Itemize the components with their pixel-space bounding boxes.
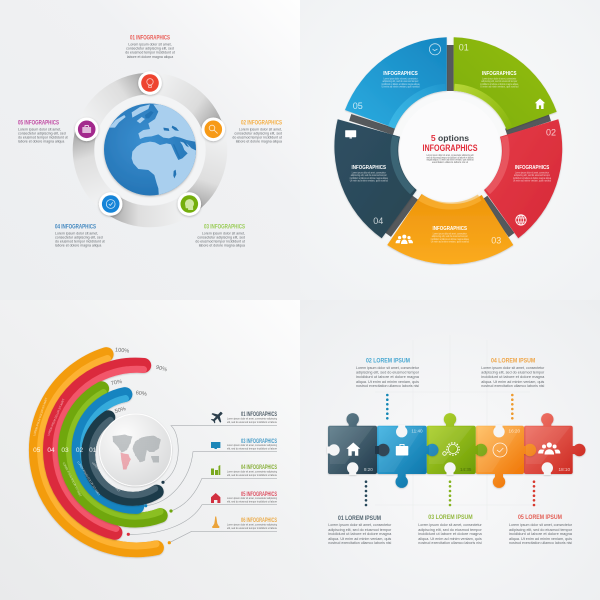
arc captions: LOREM IPSUM DOLOR SIT AMET: [76, 460, 101, 497]
text block 05 lorem ipsum: [509, 514, 573, 545]
text: 05 infographics: [18, 120, 68, 144]
dotted connector 04: [511, 394, 514, 420]
dotted connector 05: [533, 480, 535, 506]
text: green segment: adipiscing elit, sed do eiusmod tempor: [481, 79, 517, 83]
text: red segment: INFOGRAPHICS: [515, 165, 550, 171]
text: 03 infographics: [195, 224, 246, 248]
segment numbers: 02: [546, 128, 556, 138]
arc 02 blue: [79, 394, 137, 507]
text: 01 infographics: 01 INFOGRAPHICS: [130, 34, 171, 42]
icon: bars: [211, 465, 220, 475]
faint background puzzle lines: [375, 335, 540, 520]
text: 05 infographics: do eiusmod tempor incididunt ut: [18, 136, 68, 140]
text block 05 lorem ipsum: aliqua. Ut enim ad minim veniam, quis: [509, 537, 572, 541]
text block 02 lorem ipsum: [356, 357, 420, 388]
globe: [104, 104, 198, 198]
percent labels: 60%: [135, 390, 147, 398]
centre title: exercitation ullamco laboris nisi ut: [432, 160, 468, 164]
text block 02 lorem ipsum: incididunt ut labore et dolore magna: [356, 375, 419, 379]
text block 04 lorem ipsum: incididunt ut labore et dolore magna: [481, 375, 544, 379]
badge: red bulb: [138, 71, 162, 95]
percent labels: 90%: [155, 365, 167, 373]
panel: concentric arcs chart: [32, 347, 277, 550]
central disc with world map: [100, 414, 172, 486]
text block 04 lorem ipsum: aliqua. Ut enim ad minim veniam, quis: [481, 380, 545, 384]
text: orange segment: adipiscing elit, sed do eiusmod tempor: [432, 234, 468, 238]
text: green segment: Lorem ipsum dolor sit amet, consectetur: [482, 76, 516, 80]
text block 04 lorem ipsum: nostrud exercitation ullamco laboris nisi: [481, 384, 545, 388]
text: red segment: incididunt ut labore et dolore magna aliqua: [513, 176, 551, 180]
legend: 03 infographics: 03 INFOGRAPHICS: [241, 438, 277, 445]
percent labels: [110, 347, 167, 415]
text block 03 lorem ipsum: aliqua. Ut enim ad minim veniam, quis: [418, 537, 482, 541]
icon: people: [396, 235, 413, 244]
text: red segment: Lorem ipsum dolor sit amet, consectetur: [515, 170, 549, 174]
text block 04 lorem ipsum: adipiscing elit, sed do eiusmod tempor: [481, 370, 545, 374]
text: blue segment: Ut enim ad minim veniam, quis nostrud: [382, 85, 420, 89]
legend: 01 infographics: Lorem ipsum dolor sit amet, consectetur adipiscing: [227, 417, 277, 421]
centre title: sed do eiusmod tempor incididunt ut labore et dolore: [426, 155, 474, 159]
arc captions: LOREM IPSUM DOLOR SIT AMET: [91, 461, 121, 493]
text block 05 lorem ipsum: Lorem ipsum dolor sit amet, consectetur: [509, 523, 573, 527]
legend: 05 infographics: [227, 491, 277, 504]
text: 05 infographics: 05 INFOGRAPHICS: [18, 120, 60, 126]
text: 04 infographics: consectetur adipiscing elit, sed: [55, 236, 103, 240]
connector strips: [349, 45, 551, 237]
arc numbers: 01: [89, 447, 97, 454]
icon: monitor: [211, 442, 220, 449]
arc numbers: 05: [33, 447, 41, 454]
text: 02 infographics: 02 INFOGRAPHICS: [241, 120, 283, 126]
text block 03 lorem ipsum: nostrud exercitation ullamco laboris nisi: [418, 541, 482, 545]
text: dark segment: adipiscing elit, sed do eiusmod tempor: [351, 173, 387, 177]
text: dark segment: [350, 165, 388, 183]
text: 03 infographics: labore et dolore magna aliqua: [199, 244, 245, 248]
globe halo: [94, 94, 206, 206]
time labels: 9:20: [364, 467, 373, 472]
leader dots: [127, 481, 173, 544]
time labels: 14:35: [460, 467, 472, 472]
text: blue segment: [382, 71, 420, 89]
text: 02 infographics: labore et dolore magna aliqua: [236, 140, 282, 144]
segment 05 blue: [345, 37, 447, 128]
puzzle piece 01 dark: [327, 413, 389, 475]
text: 05 infographics: Lorem ipsum dolor sit amet,: [18, 128, 61, 132]
centre title: 5 options: [431, 133, 469, 143]
legend: 04 infographics: [227, 464, 277, 477]
arc 03 green: [65, 389, 160, 520]
text block 01 lorem ipsum: Lorem ipsum dolor sit amet, consectetur: [328, 523, 392, 527]
dotted connector 01: [365, 480, 367, 506]
text: 03 infographics: Lorem ipsum dolor sit amet,: [202, 232, 245, 236]
text block 03 lorem ipsum: 03 LOREM IPSUM: [428, 514, 473, 521]
text: orange segment: Lorem ipsum dolor sit amet, consectetur: [433, 232, 467, 236]
segment 02 red: [484, 119, 562, 238]
segment numbers: 03: [491, 236, 501, 246]
white centre disc: [399, 99, 501, 201]
text: 04 infographics: Lorem ipsum dolor sit amet,: [55, 232, 98, 236]
arc 04 red: [50, 365, 144, 532]
percent labels: 50%: [114, 406, 127, 415]
text block 01 lorem ipsum: 01 LOREM IPSUM: [338, 515, 381, 522]
centre title: [422, 133, 478, 164]
icon: tower: [212, 516, 219, 528]
legend: 04 infographics: 04 INFOGRAPHICS: [241, 464, 277, 471]
legend: 01 infographics: 01 INFOGRAPHICS: [241, 411, 277, 418]
text block 05 lorem ipsum: adipiscing elit, sed do eiusmod tempor: [509, 528, 573, 532]
badge: green head: [178, 192, 201, 216]
text: dark segment: Lorem ipsum dolor sit amet, consectetur: [352, 170, 386, 174]
text block 04 lorem ipsum: [481, 357, 545, 388]
puzzle piece 02 blue: [377, 425, 438, 488]
centre title: Lorem ipsum dolor sit amet, consectetur adipiscing elit: [426, 153, 474, 157]
text block 03 lorem ipsum: incididunt ut labore et dolore magna: [418, 532, 482, 536]
legend: 01 infographics: [227, 411, 277, 424]
arc captions: LOREM IPSUM DOLOR SIT AMET: [32, 397, 48, 436]
time labels: 16:20: [509, 428, 520, 434]
time labels: 11:40: [411, 428, 423, 434]
icon: plane: [211, 412, 223, 423]
text: 04 infographics: do eiusmod tempor incididunt ut: [55, 240, 105, 244]
percent labels: 100%: [115, 347, 129, 355]
badge: blue clock: [99, 192, 122, 216]
icon: clock: [429, 44, 441, 55]
arc 05 orange: [36, 354, 156, 550]
glass highlights: [330, 427, 570, 472]
badge: orange magnifier: [202, 118, 225, 141]
legend: 03 infographics: [227, 438, 277, 450]
text: dark segment: incididunt ut labore et dolore magna aliqua: [350, 176, 388, 180]
legend: 04 infographics: Lorem ipsum dolor sit amet, consectetur adipiscing: [227, 470, 277, 474]
time labels: [364, 428, 570, 472]
puzzle piece 05 red: [524, 413, 586, 475]
text block 03 lorem ipsum: [418, 514, 483, 545]
icon: people: [538, 442, 560, 454]
text: green segment: incididunt ut labore et dolore magna aliqua: [480, 82, 519, 86]
icon: house: [211, 493, 220, 503]
icon: monitor: [345, 130, 356, 138]
text block 02 lorem ipsum: aliqua. Ut enim ad minim veniam, quis: [356, 380, 419, 384]
text block 01 lorem ipsum: nostrud exercitation ullamco laboris nisi: [328, 541, 392, 545]
text: blue segment: adipiscing elit, sed do eiusmod tempor: [382, 79, 419, 83]
text: green segment: [480, 71, 519, 89]
legend: 06 infographics: elit, sed do eiusmod tempor incididunt ut labore: [227, 526, 277, 530]
text block 04 lorem ipsum: 04 LOREM IPSUM: [491, 357, 535, 364]
text block 02 lorem ipsum: nostrud exercitation ullamco laboris nisi: [356, 384, 419, 388]
text: 03 infographics: do eiusmod tempor incididunt ut: [195, 240, 245, 244]
text: dark segment: INFOGRAPHICS: [352, 165, 386, 171]
text: 02 infographics: consectetur adipiscing elit, sed: [234, 132, 282, 136]
icon: house: [346, 442, 360, 456]
text: dark segment: Ut enim ad minim veniam, quis nostrud: [350, 179, 388, 183]
time labels: 18:10: [559, 467, 570, 472]
panel: globe infographic: [18, 34, 283, 248]
legend: 05 infographics: 05 INFOGRAPHICS: [241, 491, 277, 498]
arc numbers: [33, 447, 97, 454]
legend: 03 infographics: Lorem ipsum dolor sit amet, consectetur adipiscing: [227, 443, 277, 447]
arc numbers: 02: [76, 447, 83, 454]
legend: 06 infographics: [227, 517, 277, 530]
text block 05 lorem ipsum: 05 LOREM IPSUM: [518, 514, 562, 521]
text block 04 lorem ipsum: Lorem ipsum dolor sit amet, consectetur: [481, 366, 545, 370]
segment numbers: 01: [459, 42, 469, 52]
arc numbers: 04: [47, 447, 55, 454]
text: 04 infographics: [55, 224, 105, 248]
arc numbers: 03: [61, 447, 69, 454]
text: orange segment: incididunt ut labore et dolore magna aliqua: [431, 237, 469, 241]
text: 02 infographics: Lorem ipsum dolor sit amet,: [239, 128, 282, 132]
dotted connector 03: [449, 480, 451, 506]
segment numbers: 05: [353, 101, 363, 111]
icon: clock: [493, 443, 507, 457]
text: green segment: Ut enim ad minim veniam, quis nostrud: [480, 85, 519, 89]
text: 04 infographics: labore et dolore magna aliqua: [55, 244, 101, 248]
text block 01 lorem ipsum: aliqua. Ut enim ad minim veniam, quis: [328, 537, 392, 541]
text: blue segment: incididunt ut labore et dolore magna aliqua: [382, 82, 420, 86]
text: 05 infographics: consectetur adipiscing elit, sed: [18, 132, 66, 136]
legend: 06 infographics: Lorem ipsum dolor sit amet, consectetur adipiscing: [227, 523, 277, 527]
puzzle piece 04 orange: [476, 425, 536, 488]
text block 01 lorem ipsum: incididunt ut labore et dolore magna: [328, 532, 391, 536]
text block 02 lorem ipsum: 02 LOREM IPSUM: [366, 357, 410, 364]
text: 02 infographics: [232, 120, 283, 144]
text: red segment: [513, 165, 551, 183]
percent labels: 70%: [110, 379, 123, 387]
legend: 05 infographics: elit, sed do eiusmod tempor incididunt ut labore: [227, 500, 277, 504]
centre title: magna aliqua. Ut enim ad minim veniam, quis nostrud: [426, 158, 474, 162]
grey segmented ring: [84, 84, 216, 217]
text block 03 lorem ipsum: adipiscing elit, sed do eiusmod tempor: [418, 528, 483, 532]
icon: house: [535, 98, 545, 109]
text: 03 infographics: 03 INFOGRAPHICS: [204, 224, 246, 230]
puzzle piece 03 green: [427, 413, 487, 475]
text block 02 lorem ipsum: Lorem ipsum dolor sit amet, consectetur: [356, 366, 420, 370]
icon: briefcase: [396, 444, 408, 456]
arc captions: [32, 397, 121, 498]
text: 01 infographics: [125, 34, 175, 59]
legend: 01 infographics: elit, sed do eiusmod tempor incididunt ut labore: [227, 420, 277, 424]
segment 03 orange: [387, 194, 513, 264]
text block 03 lorem ipsum: Lorem ipsum dolor sit amet, consectetur: [418, 523, 483, 527]
text: 05 infographics: labore et dolore magna aliqua: [18, 140, 64, 144]
text: red segment: adipiscing elit, sed do eiusmod tempor: [514, 173, 550, 177]
text block 05 lorem ipsum: incididunt ut labore et dolore magna: [509, 532, 572, 536]
legend: 04 infographics: elit, sed do eiusmod tempor incididunt ut labore: [227, 473, 277, 477]
text: 01 infographics: consectetur adipiscing elit, sed: [126, 47, 174, 51]
icon: globe: [516, 215, 526, 225]
arc 01 dark: [88, 417, 157, 499]
segment 01 green: [454, 37, 557, 130]
text: orange segment: [431, 226, 469, 244]
text block 01 lorem ipsum: adipiscing elit, sed do eiusmod tempor: [328, 528, 392, 532]
text: 01 infographics: do eiusmod tempor incididunt ut: [125, 51, 175, 55]
centre title: INFOGRAPHICS: [422, 143, 478, 153]
legend: 06 infographics: 06 INFOGRAPHICS: [241, 517, 277, 524]
text: red segment: Ut enim ad minim veniam, quis nostrud: [513, 179, 551, 183]
arc captions: LOREM IPSUM DOLOR SIT AMET: [62, 462, 83, 498]
icon: gear: [443, 443, 459, 455]
text block 05 lorem ipsum: nostrud exercitation ullamco laboris nisi: [509, 541, 572, 545]
text block 02 lorem ipsum: adipiscing elit, sed do eiusmod tempor: [356, 370, 420, 374]
legend: 05 infographics: Lorem ipsum dolor sit amet, consectetur adipiscing: [227, 496, 277, 500]
badge: purple briefcase: [75, 118, 98, 141]
text: 02 infographics: do eiusmod tempor incididunt ut: [232, 136, 282, 140]
text: orange segment: Ut enim ad minim veniam, quis nostrud: [431, 240, 469, 244]
text: 04 infographics: 04 INFOGRAPHICS: [55, 224, 97, 230]
segment 04 dark: [334, 119, 417, 238]
panel: puzzle timeline: [327, 335, 586, 545]
panel: 5 options pie ring: [334, 37, 562, 264]
text: orange segment: INFOGRAPHICS: [433, 226, 467, 232]
text: green segment: INFOGRAPHICS: [482, 71, 517, 77]
text: blue segment: Lorem ipsum dolor sit amet, consectetur: [384, 76, 418, 80]
dotted connector 02: [386, 394, 389, 420]
text: 01 infographics: labore et dolore magna aliqua: [127, 55, 173, 59]
leader lines: [128, 426, 277, 543]
text block 01 lorem ipsum: [328, 515, 392, 545]
text: 03 infographics: consectetur adipiscing elit, sed: [197, 236, 245, 240]
legend: 03 infographics: elit, sed do eiusmod tempor incididunt ut labore: [227, 446, 277, 450]
segment numbers: [353, 42, 556, 246]
segment numbers: 04: [373, 216, 383, 226]
text: 01 infographics: Lorem ipsum dolor sit amet,: [128, 42, 172, 46]
arc captions: LOREM IPSUM DOLOR SIT AMET: [46, 398, 66, 436]
text: blue segment: INFOGRAPHICS: [383, 71, 418, 77]
